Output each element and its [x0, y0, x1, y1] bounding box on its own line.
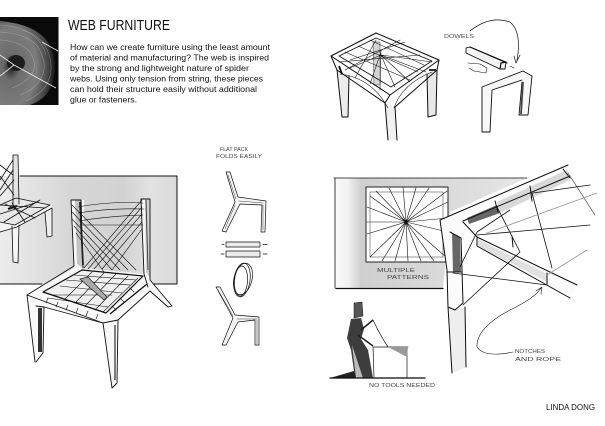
text: multiple patterns note: [377, 268, 429, 281]
shadows: [43, 359, 78, 361]
folded profile 1: [222, 172, 266, 232]
sketch: dowel pieces: [466, 47, 514, 73]
frame outlines: [27, 199, 172, 388]
seat: [42, 270, 143, 313]
sketch: radial web pattern: [366, 187, 448, 262]
table strings: [339, 40, 432, 108]
text: notches note: NOTCHES: [515, 349, 545, 355]
arrow: dowel to frame: [470, 20, 520, 63]
text: multiple patterns note: PATTERNS: [387, 275, 429, 281]
rope coil: [232, 262, 252, 298]
seat strings: [46, 272, 138, 319]
panel: multiple patterns backdrop: [334, 178, 527, 288]
flat bars: [226, 242, 260, 247]
text block: description: [69, 42, 271, 104]
sketch: kneeling figure building stool: [330, 302, 425, 378]
sketch: main rope chair: [27, 199, 192, 388]
rope lines: [453, 173, 597, 305]
photo: spider web disc: [0, 17, 58, 105]
white joint fill: [440, 165, 577, 310]
text block: description: glue or fasteners.: [70, 94, 137, 104]
credit: LINDA DONG: [546, 403, 595, 412]
text block: description: webs. Using only tension from string, these pieces: [69, 74, 263, 84]
sketch: web table: [331, 33, 439, 140]
sketch: flat pack parts: [216, 172, 267, 345]
text: notches note: [515, 349, 562, 363]
sketch: mitered corner joint: [440, 165, 597, 373]
text block: description: can hold their structure easily without additional: [70, 84, 257, 94]
text: notches note: AND ROPE: [515, 357, 562, 363]
back strings: [72, 200, 144, 272]
chair frame fill: [27, 199, 172, 388]
text: no tools needed note: NO TOOLS NEEDED: [369, 383, 435, 389]
title: WEB FURNITURE: [68, 17, 170, 34]
text block: description: How can we create furniture using the least amount: [70, 42, 271, 52]
sketch: small background chair: [0, 155, 74, 263]
text: flat pack note: FLAT PACK: [220, 147, 248, 153]
text block: description: by the strong and lightweight nature of spider: [70, 63, 249, 73]
folded profile 2: [216, 287, 259, 345]
text block: description: of material and manufacturing? The web is inspired: [70, 52, 269, 62]
sketch: table frame: [482, 71, 532, 132]
panel: chair sketch backdrop: [0, 176, 177, 284]
text: flat pack note: FOLDS EASILY: [216, 154, 262, 160]
text: multiple patterns note: MULTIPLE: [377, 268, 415, 274]
seat brace: [80, 277, 107, 300]
text: flat pack note: [216, 147, 262, 160]
text: dowels label: DOWELS: [444, 34, 474, 40]
arrow: callout to mitered joint: [477, 287, 542, 354]
